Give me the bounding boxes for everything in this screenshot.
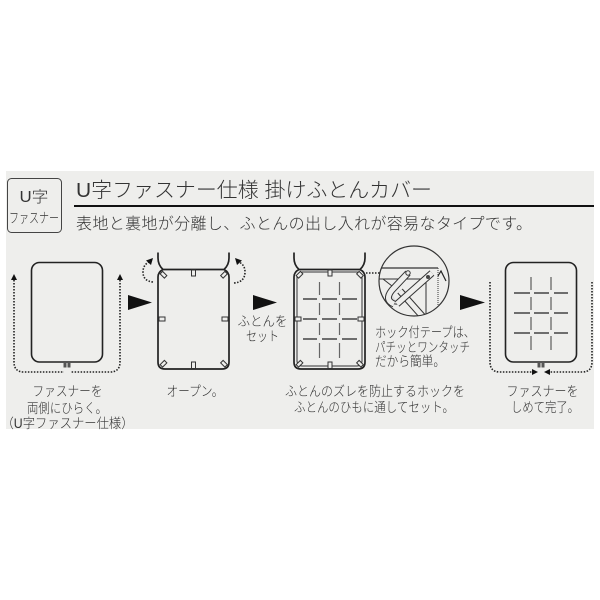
arrow: step 2 to 3: [253, 295, 277, 310]
step 1 caption: [2, 384, 134, 431]
step 3: cover with futon and hooks: [294, 252, 365, 369]
subtitle: 表地と裏地が分離し、ふとんの出し入れが容易なタイプです。: [76, 215, 532, 233]
badge: U字ファスナー: U字: [20, 188, 48, 206]
step 4 caption: しめて完了。: [511, 400, 579, 415]
step 1: closed cover with open arrows: [11, 262, 123, 372]
detail note: パチッとワンタッチ: [375, 340, 470, 355]
step 2 caption: オープン。: [166, 384, 224, 399]
step 1 caption: ファスナーを: [32, 384, 102, 399]
step 2: opened cover: [143, 252, 245, 369]
hook detail circle: [376, 246, 449, 320]
leader to detail: [366, 272, 381, 274]
step 3 caption: ふとんのズレを防止するホックを: [285, 384, 465, 399]
title rule: [74, 205, 594, 207]
step 1 caption: 両側にひらく。: [27, 401, 107, 416]
arrow: step 3 to 4: [460, 295, 485, 310]
title: U字ファスナー仕様 掛けふとんカバー: [76, 179, 432, 202]
arrow label: セット: [246, 329, 279, 344]
step 3 caption: [285, 384, 465, 415]
step 4: closed cover with futon: [490, 262, 592, 375]
arrow label: ふとんを: [238, 314, 288, 329]
step 1 caption: （U字ファスナー仕様）: [2, 416, 134, 431]
detail note: だから簡単。: [375, 354, 445, 369]
step 4 caption: [506, 384, 579, 415]
arrow: step 1 to 2: [128, 295, 152, 310]
badge: U字ファスナー: ファスナー: [9, 210, 59, 226]
detail note: [375, 325, 475, 369]
detail note: ホック付テープは、: [375, 325, 475, 340]
arrow label: [238, 314, 288, 344]
background panel: [6, 171, 594, 429]
badge: U字ファスナー: [8, 178, 62, 232]
step 3 caption: ふとんのひもに通してセット。: [294, 400, 454, 415]
step 4 caption: ファスナーを: [506, 384, 578, 399]
